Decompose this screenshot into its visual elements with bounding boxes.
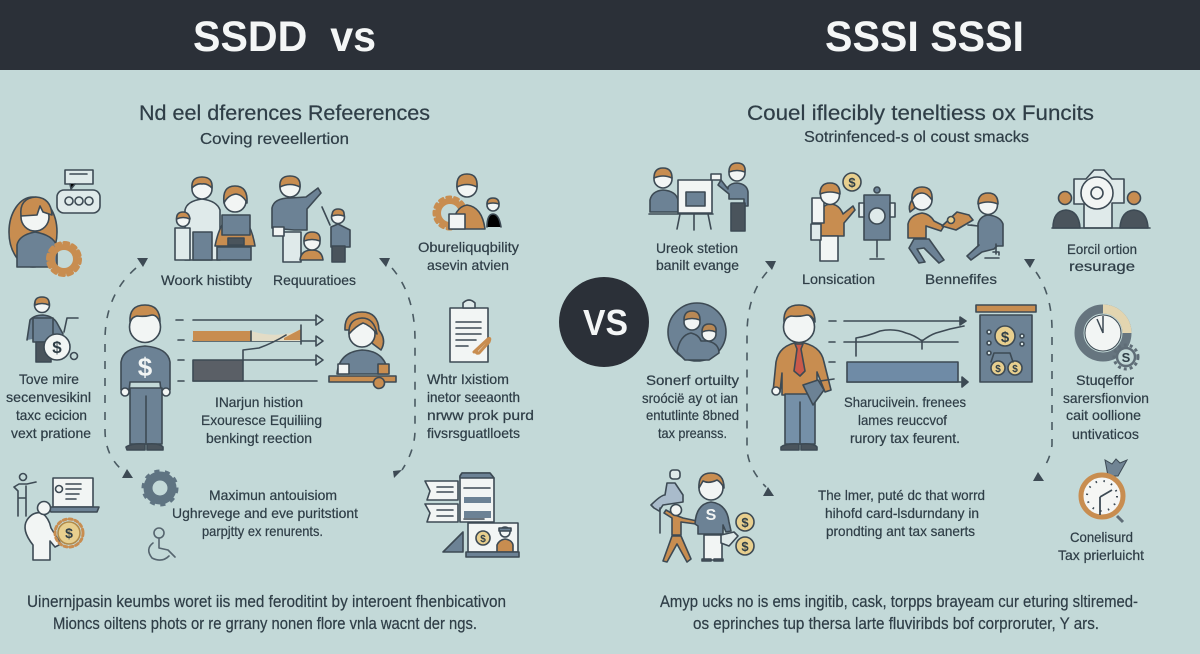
icon: two people in circle: [668, 303, 726, 361]
text: soft ortuity: [642, 372, 739, 441]
icon: central man with dollar sweater: $: [138, 352, 153, 382]
text: what history: Whtr Ixistiom: [427, 371, 509, 387]
text: share: rurory tax feurent.: [850, 430, 960, 446]
right heading: Sotrinfenced-s ol coust smacks: [804, 129, 1029, 146]
text: soft ortuity: tax preanss.: [658, 425, 727, 441]
left heading: Nd eel dferences Refeerences: [139, 102, 430, 125]
icon: team reaching up: [272, 176, 350, 262]
icon: person with money bag: $: [52, 338, 62, 357]
icon: man with kiosk and coin: [811, 173, 895, 261]
text: what history: nrww prok purd: [427, 407, 534, 423]
icon: clipboard with paperclip: [450, 300, 490, 362]
text: obligation: [418, 239, 519, 273]
text: history: [201, 394, 322, 446]
text: soft ortuity: Sonerf ortuilty: [646, 372, 739, 388]
bottom note: right: [660, 593, 1138, 633]
label: requirements: Requuratioes: [273, 272, 356, 288]
text: tax decision: taxc ecicion: [16, 407, 87, 423]
icon: savings box with coins: [976, 305, 1036, 382]
text: history: Exouresce Equiliing: [201, 412, 322, 428]
text: history: benkingt reection: [206, 430, 312, 446]
text: conclusion: Tax prierluicht: [1058, 547, 1144, 563]
text: maximum: Ughrevege and eve puritstiont: [172, 505, 358, 521]
right heading: Couel iflecibly teneltiess ox Funcits: [747, 102, 1094, 125]
arrow: second left dashed loop: [747, 261, 776, 496]
text: station: banilt evange: [656, 257, 739, 273]
icon: documents and monitor: $: [480, 534, 486, 545]
bottom note: right: Amyp ucks no is ems ingitib, cask, torpps brayeam cur eturing sltiremed-: [660, 593, 1138, 611]
icon: round clock with crown: [1081, 459, 1127, 522]
icon: woman with speech bubble and gear: [9, 170, 100, 275]
text: tax decision: [6, 371, 91, 441]
label: benefits: Bennefifes: [925, 271, 997, 287]
text: maximum: parpjtty ex renurents.: [202, 523, 323, 539]
left heading: [139, 102, 430, 148]
icon: family group: [175, 177, 255, 260]
text: tax decision: secenvesikinl: [6, 389, 91, 405]
icon: dial with two figures: [1052, 170, 1150, 228]
panel: left side: [6, 102, 534, 633]
icon: savings box with coins: $: [1012, 364, 1018, 375]
label: location: Lonsication: [802, 271, 875, 287]
bottom note: right: os eprinches tup thersa larte fluviribds bof corproruter, Y ars.: [693, 615, 1099, 633]
text: what history: [427, 371, 534, 441]
bottom note: left: Mioncs oiltens phots or re grrany nonen flore vnla wacnt der ngs.: [53, 615, 477, 633]
text: soft ortuity: sroócië ay ot ian: [642, 390, 738, 406]
label: work history: Woork histibty: [161, 272, 252, 288]
header bar: [0, 0, 1200, 70]
text: station: [656, 240, 739, 273]
icon: two people exchanging: [908, 187, 1003, 263]
chart: left process lines: [176, 315, 323, 381]
bottom note: left: [27, 593, 506, 633]
text: maximum: Maximun antouisiom: [209, 487, 337, 503]
text: social option: resurage: [1069, 258, 1135, 274]
text: conclusion: Conelisurd: [1070, 529, 1133, 545]
vs badge: [559, 277, 649, 367]
text: the timer: [818, 487, 985, 539]
icon: adviser with gear: [434, 174, 501, 229]
icon: clock with gear: S: [1122, 350, 1131, 365]
icon: gear: [144, 472, 176, 504]
header bar: SSDD vs: [193, 13, 376, 61]
text: obligation: Obureliquqbility: [418, 239, 519, 255]
arrow: left dashed loop: [105, 258, 148, 478]
icon: clock with gear: [1079, 309, 1138, 369]
text: share: lames reuccvof: [858, 412, 947, 428]
header bar: SSSI SSSI: [825, 13, 1024, 61]
panel: right side: [642, 102, 1150, 633]
text: strategy: sarersfionvion: [1063, 390, 1149, 406]
text: share: [844, 394, 966, 446]
icon: savings box with coins: $: [995, 364, 1001, 375]
icon: person with money bag: [27, 297, 78, 362]
icon: central man with dollar sweater: [121, 305, 170, 450]
text: what history: inetor seeaonth: [427, 389, 520, 405]
text: conclusion: [1058, 529, 1144, 563]
icon: adult and child with coins: $: [741, 515, 749, 530]
icon: woman at desk: [329, 312, 396, 388]
text: share: Sharuciivein. frenees: [844, 394, 966, 410]
text: strategy: [1063, 372, 1149, 442]
text: social option: [1067, 241, 1137, 274]
text: maximum: [172, 487, 358, 539]
icon: savings box with coins: $: [1001, 329, 1010, 346]
text: station: Ureok stetion: [656, 240, 738, 256]
icon: adult and child with coins: [651, 470, 754, 562]
text: tax decision: vext pratione: [11, 425, 91, 441]
icon: adult and child with coins: $: [741, 539, 749, 554]
text: tax decision: Tove mire: [19, 371, 79, 387]
text: history: INarjun histion: [215, 394, 303, 410]
icon: wheelchair: [149, 528, 175, 560]
vs badge: VS: [583, 302, 628, 343]
icon: man with kiosk and coin: $: [848, 175, 856, 190]
icon: presenter with board: [649, 163, 748, 231]
text: obligation: asevin atvien: [427, 257, 509, 273]
icon: central man with tie: [772, 305, 834, 450]
bottom note: left: Uinernjpasin keumbs woret iis med feroditint by interoent fhenbicativon: [27, 593, 506, 611]
icon: adult and child with coins: S: [706, 507, 717, 524]
right heading: [747, 102, 1094, 146]
icon: person and laptop: $: [65, 525, 73, 541]
icon: person and laptop: [14, 474, 99, 560]
text: what history: fivsrsguatlloets: [427, 425, 520, 441]
text: the timer: The lmer, puté dc that worrd: [818, 487, 985, 503]
left heading: Coving reveellertion: [200, 131, 349, 148]
text: soft ortuity: entutlinte 8bned: [646, 407, 739, 423]
text: strategy: cait oolliоne: [1066, 407, 1141, 423]
text: social option: Eorcil ortion: [1067, 241, 1137, 257]
text: the timer: prondting ant tax sanerts: [826, 523, 975, 539]
text: strategy: untivaticos: [1072, 426, 1139, 442]
icon: documents and monitor: [425, 473, 519, 557]
arrow: second right dashed loop: [1024, 259, 1052, 481]
arrow: right dashed loop: [379, 258, 415, 478]
chart: right trend lines: [829, 317, 968, 387]
text: strategy: Stuqeffor: [1076, 372, 1134, 388]
text: the timer: hihofd card-lsdurndany in: [825, 505, 979, 521]
